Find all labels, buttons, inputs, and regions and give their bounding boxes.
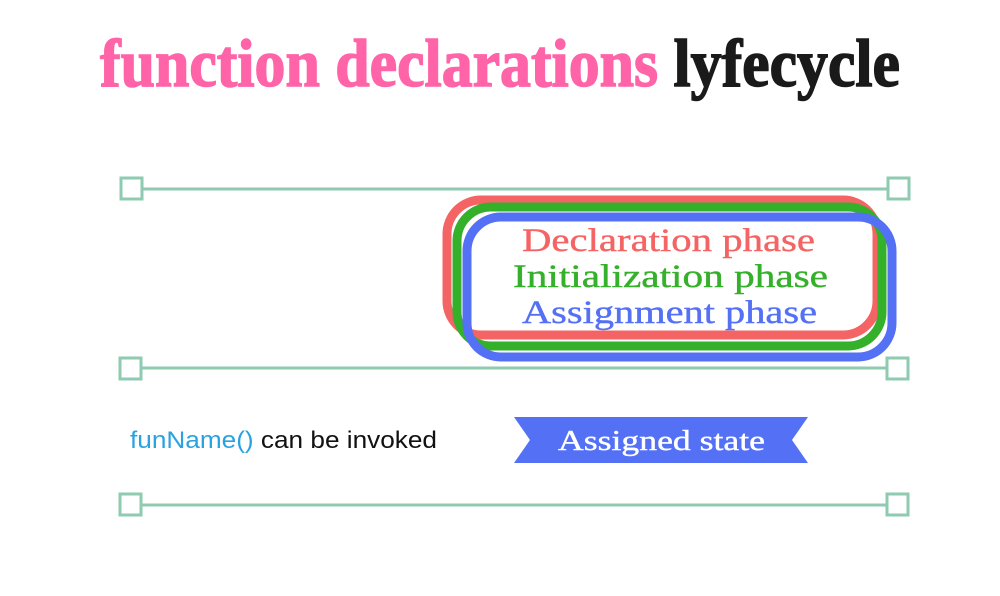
text: declaration phase: Declaration phase	[522, 223, 815, 259]
phases box	[447, 200, 892, 357]
caption: funName can be invoked: funName() can be invoked	[130, 427, 437, 454]
timeline line middle	[120, 358, 908, 379]
title: function declarations lyfecycle	[100, 25, 900, 101]
ribbon: assigned state	[514, 417, 808, 463]
ribbon: assigned state: Assigned state	[558, 425, 765, 457]
text: initialization phase: Initialization phase	[513, 259, 828, 295]
text: assignment phase: Assignment phase	[522, 295, 817, 331]
timeline line top	[121, 178, 909, 199]
timeline line bottom	[120, 494, 908, 515]
